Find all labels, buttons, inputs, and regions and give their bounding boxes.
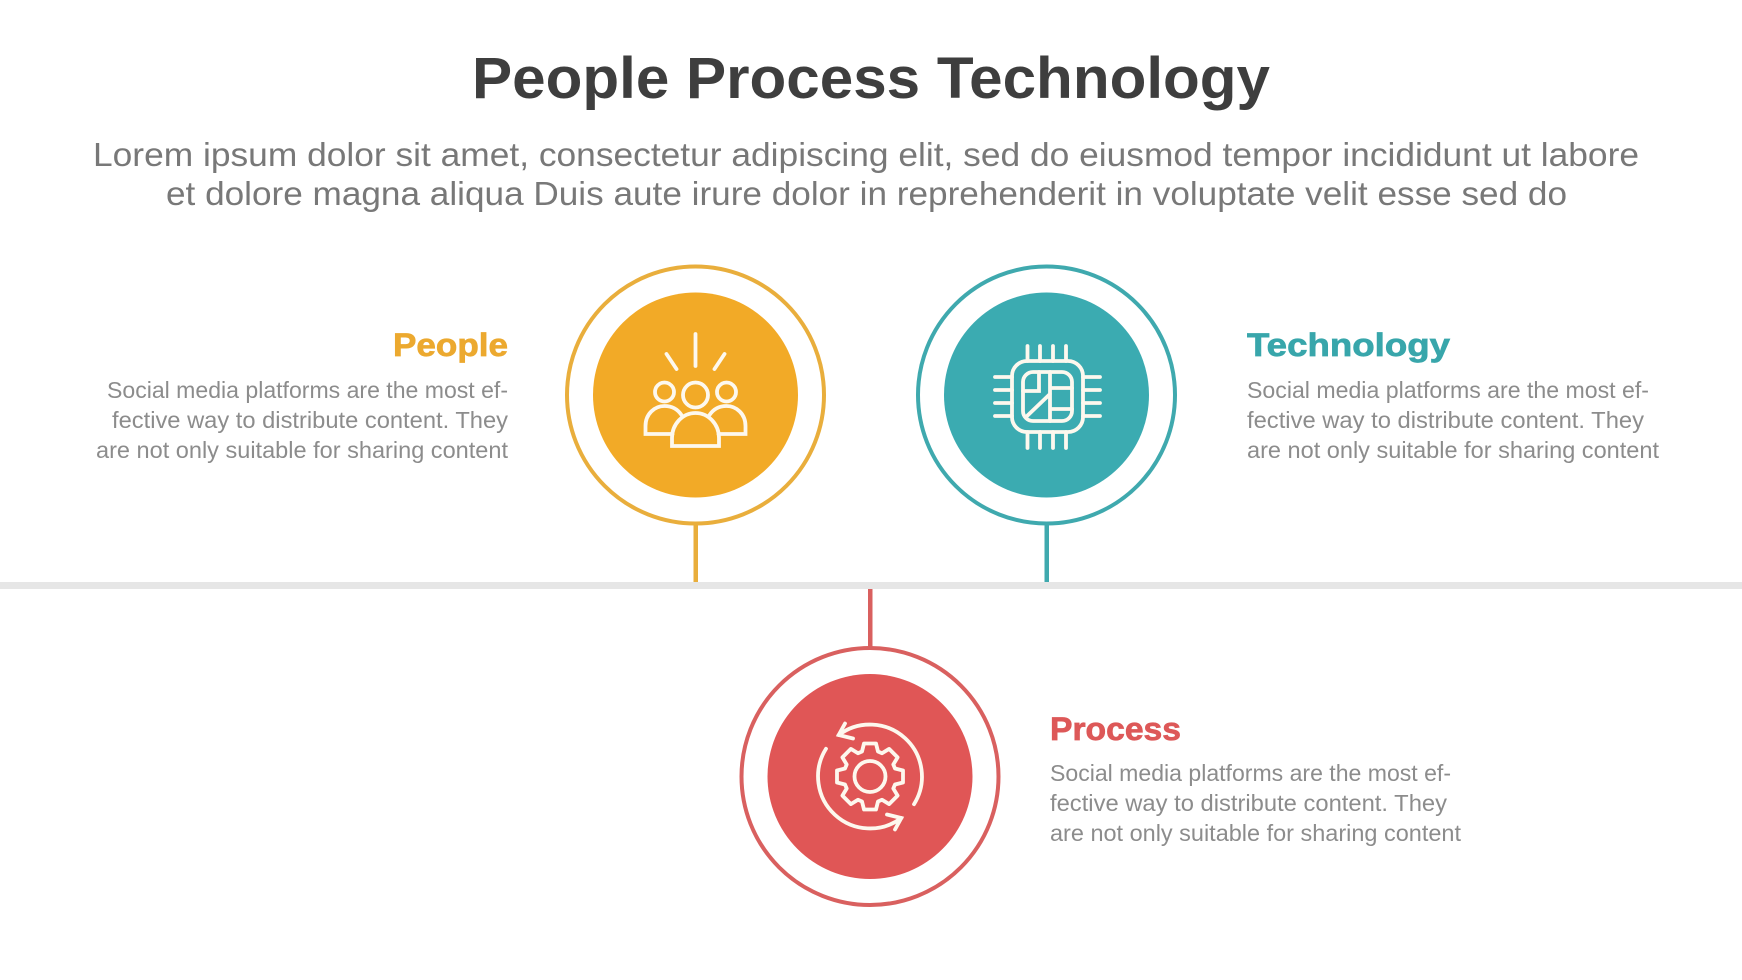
icon: people group [646, 334, 746, 446]
timeline divider [0, 582, 1742, 589]
technology outer ring [918, 266, 1175, 524]
people description [96, 377, 508, 463]
process description [1050, 760, 1461, 846]
people filled circle [593, 292, 798, 498]
panel: people [96, 266, 824, 582]
technology description: fective way to distribute content. They [1247, 407, 1644, 433]
people heading: People [393, 327, 508, 363]
panel: technology [918, 266, 1659, 582]
subtitle text block [93, 136, 1639, 212]
people description: are not only suitable for sharing content [96, 437, 508, 463]
process description: are not only suitable for sharing content [1050, 820, 1461, 846]
process filled circle [768, 674, 972, 879]
people description: fective way to distribute content. They [112, 407, 508, 433]
process description: fective way to distribute content. They [1050, 790, 1447, 816]
technology heading: Technology [1247, 327, 1450, 363]
people outer ring [567, 266, 824, 524]
technology description [1247, 377, 1659, 463]
process description: Social media platforms are the most ef- [1050, 760, 1451, 786]
icon: gear with cycle arrows [818, 724, 922, 830]
people description: Social media platforms are the most ef- [107, 377, 508, 403]
subtitle text block: Lorem ipsum dolor sit amet, consectetur adipiscing elit, sed do eiusmod tempor incididunt ut labore [93, 136, 1639, 173]
panel: process [742, 589, 1461, 905]
process heading: Process [1050, 711, 1181, 747]
connector: technology stem [1044, 524, 1049, 582]
technology filled circle [944, 292, 1149, 498]
technology description: are not only suitable for sharing content [1247, 437, 1659, 463]
icon: microchip [995, 346, 1100, 448]
technology description: Social media platforms are the most ef- [1247, 377, 1649, 403]
connector: process stem [868, 589, 872, 648]
subtitle text block: et dolore magna aliqua Duis aute irure dolor in reprehenderit in voluptate velit esse sed do [166, 175, 1567, 212]
connector: people stem [694, 524, 698, 582]
process outer ring [742, 648, 998, 905]
title: People Process Technology [472, 46, 1270, 111]
